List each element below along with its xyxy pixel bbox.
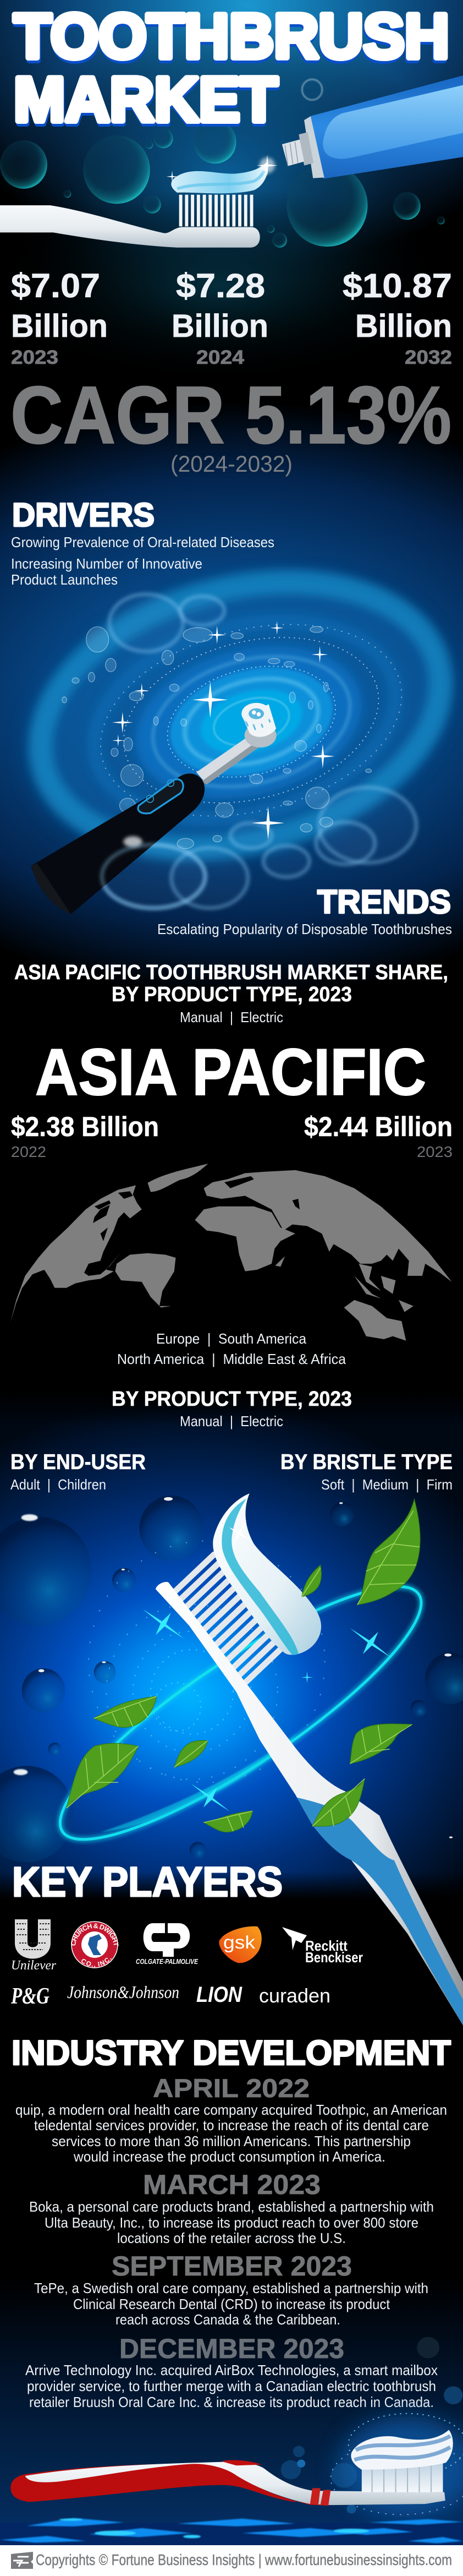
title: MARKET <box>14 65 278 135</box>
stat: 2024 value: Billion <box>172 308 268 344</box>
red and white toothbrush <box>10 2430 453 2506</box>
stat: 2023 value: Billion <box>11 308 108 344</box>
stat: 2023 value: $7.07 <box>11 267 100 304</box>
toothbrush <box>0 155 278 248</box>
development: April 2022: APRIL 2022 <box>153 2073 310 2103</box>
title: MARKET <box>15 68 278 138</box>
stat: 2032 value: 2032 <box>405 347 452 368</box>
logo: Lion: LION <box>196 1983 242 2007</box>
logo: Colgate-Palmolive: COLGATE-PALMOLIVE <box>136 1957 198 1966</box>
stat: 2024 value: 2024 <box>196 347 245 368</box>
logo: Church and Dwight: CO., INC. <box>81 1957 112 1967</box>
development: April 2022 <box>15 2073 447 2165</box>
development: September 2023: TePe, a Swedish oral care company, established a partnership with <box>34 2280 428 2296</box>
illustration: toothpaste tube, brush and bubbles <box>0 75 463 248</box>
driver: oral-related diseases: Growing Prevalence of Oral-related Diseases <box>11 534 274 550</box>
development: December 2023: Arrive Technology Inc. acquired AirBox Technologies, a smart mailbox <box>25 2362 438 2378</box>
regional product types: Manual | Electric <box>180 1009 283 1025</box>
development: September 2023 <box>34 2251 428 2328</box>
development: December 2023: provider service, to further merge with a Canadian electric toothbrush <box>27 2378 436 2394</box>
stat: 2032 value: $10.87 <box>343 267 452 304</box>
footer logo <box>11 2552 33 2569</box>
development: December 2023: retailer Bruush Oral Care Inc. & increase its product reach in Canada. <box>29 2394 434 2410</box>
water drops <box>0 1496 463 1863</box>
other regions: North America | Middle East & Africa <box>117 1351 346 1367</box>
value 2022: 2022 <box>11 1143 46 1160</box>
industry development heading: INDUSTRY DEVELOPMENT <box>12 2034 451 2072</box>
by bristle type <box>280 1450 453 1493</box>
value 2023 <box>304 1111 453 1160</box>
glow speckles <box>89 1541 325 1782</box>
development: September 2023: reach across Canada & the Caribbean. <box>115 2311 340 2328</box>
development: March 2023: MARCH 2023 <box>143 2169 321 2200</box>
by end-user <box>10 1450 146 1493</box>
water swirl <box>2 540 463 897</box>
logo: Curaden: curaden <box>259 1984 330 2007</box>
key players heading: KEY PLAYERS <box>12 1859 283 1906</box>
large soap bubbles <box>102 594 416 908</box>
development: March 2023: locations of the retailer across the U.S. <box>117 2230 346 2246</box>
toothpaste tube <box>282 75 463 179</box>
illustration: toothbrush with mint leaves <box>0 1493 463 2026</box>
footer <box>0 2545 463 2576</box>
value 2022: $2.38 Billion <box>11 1111 159 1142</box>
drivers heading: DRIVERS <box>12 496 155 533</box>
value 2022 <box>11 1111 159 1160</box>
bristles <box>174 1554 285 1683</box>
cyan orbit ring <box>34 1550 447 1876</box>
electric toothbrush <box>31 703 277 914</box>
mint leaves <box>67 1499 420 1832</box>
by bristle type: Soft | Medium | Firm <box>321 1476 453 1493</box>
logo: Unilever: Unilever <box>11 1958 57 1973</box>
product type segments: Manual | Electric <box>180 1413 283 1429</box>
development: March 2023 <box>29 2169 434 2246</box>
development: March 2023: Boka, a personal care products brand, established a partnership with <box>29 2198 434 2215</box>
stat: 2024 value <box>172 267 268 368</box>
development: September 2023: SEPTEMBER 2023 <box>112 2251 352 2282</box>
logo: GSK <box>219 1926 262 1963</box>
logo: Reckitt Benckiser <box>282 1927 363 1966</box>
toothpaste <box>213 1493 321 1655</box>
logo: Church and Dwight: CHURCH & DWIGHT <box>71 1923 119 1946</box>
stat: 2032 value <box>343 267 452 368</box>
asia pacific title: ASIA PACIFIC <box>35 1035 426 1109</box>
illustration: red toothbrush over water <box>0 2337 463 2546</box>
logo: Johnson & Johnson: Johnson&Johnson <box>67 1982 179 2002</box>
value 2023: $2.44 Billion <box>304 1111 453 1142</box>
trends heading: TRENDS <box>317 883 451 920</box>
CAGR period: (2024-2032) <box>170 451 293 477</box>
title: TOOTHBRUSH <box>15 4 448 74</box>
logo: Colgate-Palmolive <box>136 1923 198 1966</box>
by end-user: Adult | Children <box>10 1476 106 1493</box>
development: September 2023: Clinical Research Dental (CRD) to increase its product <box>73 2296 390 2312</box>
world map <box>10 1164 452 1341</box>
logo: Reckitt Benckiser: Benckiser <box>305 1949 363 1966</box>
stat: 2023 value <box>11 267 108 368</box>
development: March 2023: Ulta Beauty, Inc., to increase its product reach to over 800 store <box>45 2214 418 2231</box>
development: December 2023: DECEMBER 2023 <box>119 2333 344 2364</box>
sparkles <box>135 1598 399 1821</box>
bubbles <box>0 79 445 248</box>
logo: Unilever <box>11 1919 57 1973</box>
value 2023: 2023 <box>417 1143 453 1160</box>
development: April 2022: services to more than 36 million Americans. This partnership <box>52 2133 411 2149</box>
development: December 2023 <box>25 2333 438 2410</box>
leaf veins <box>67 1511 420 1831</box>
stat: 2023 value: 2023 <box>11 347 58 368</box>
water surface <box>0 2518 463 2546</box>
water droplets <box>62 626 372 849</box>
driver: innovative launches <box>11 555 202 588</box>
handle <box>156 1582 463 2026</box>
stat: 2032 value: Billion <box>355 308 452 344</box>
other regions <box>117 1330 346 1367</box>
driver: innovative launches: Product Launches <box>11 571 118 588</box>
other regions: Europe | South America <box>156 1330 307 1347</box>
logo: GSK: gsk <box>223 1932 256 1952</box>
logo: P&G: P&G <box>10 1984 49 2009</box>
logo: Reckitt Benckiser: Reckitt <box>305 1938 348 1954</box>
title: TOOTHBRUSH <box>14 2 449 72</box>
by product type heading: BY PRODUCT TYPE, 2023 <box>112 1388 352 1411</box>
by end-user: BY END-USER <box>10 1450 146 1474</box>
regional heading: BY PRODUCT TYPE, 2023 <box>112 983 352 1006</box>
bokeh glow <box>281 2337 463 2518</box>
logo: Church and Dwight <box>71 1921 119 1968</box>
title <box>14 2 449 138</box>
stat: 2024 value: $7.28 <box>176 267 265 304</box>
development: April 2022: would increase the product consumption in America. <box>73 2148 385 2165</box>
development: April 2022: teledental services provider, to increase the reach of its dental care <box>34 2117 429 2133</box>
sparkles <box>112 621 334 839</box>
driver: innovative launches: Increasing Number of Innovative <box>11 555 202 572</box>
trend: disposable toothbrushes: Escalating Popularity of Disposable Toothbrushes <box>157 921 452 937</box>
illustration: electric toothbrush swirl <box>2 540 463 914</box>
regional heading <box>14 961 448 1006</box>
